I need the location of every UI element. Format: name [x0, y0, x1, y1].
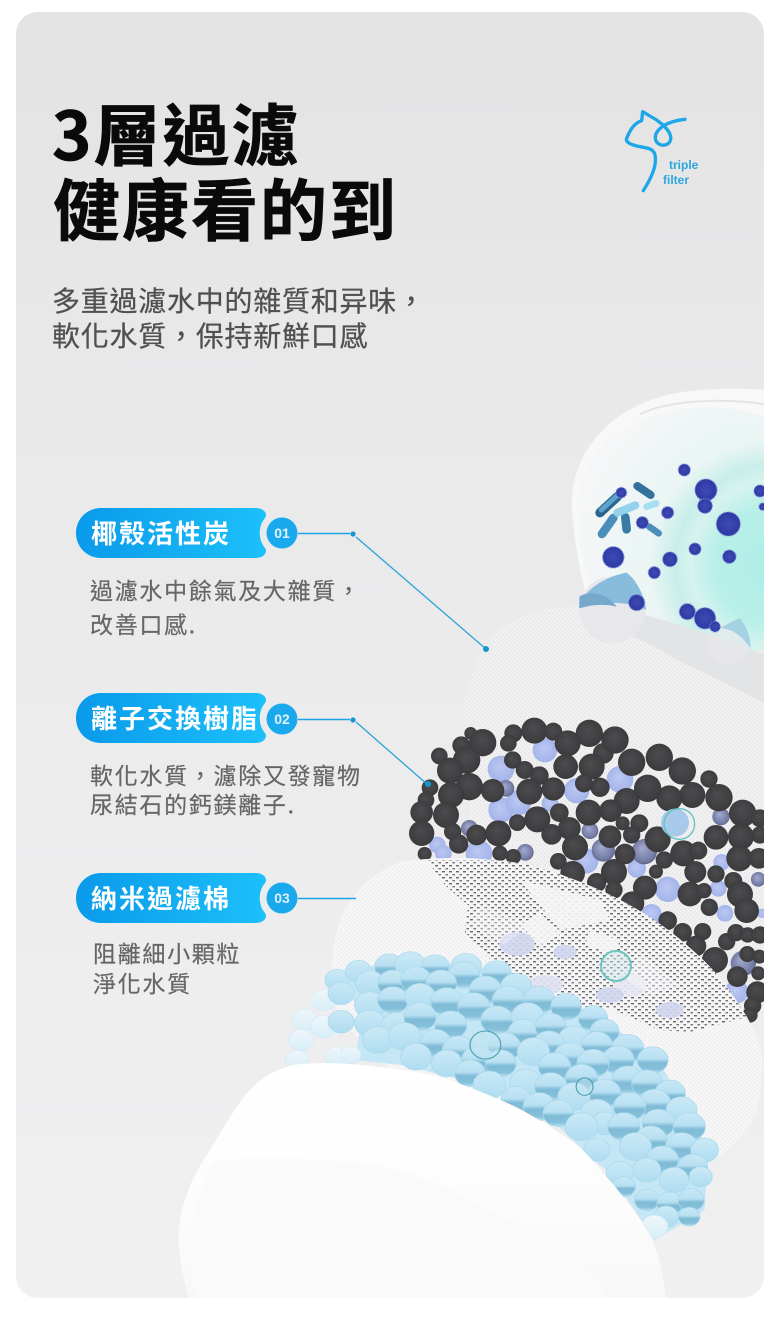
- callout 02: ion exchange resin: 尿結石的鈣鎂離子.: [90, 786, 296, 820]
- label pill: [76, 873, 266, 923]
- label pill: [76, 693, 266, 743]
- description: 阻離細小顆粒: [93, 935, 241, 969]
- resin beads behind: [429, 738, 766, 1003]
- resin seen through mesh: [499, 932, 684, 1018]
- callout 01: coconut shell carbon: 01: [274, 525, 290, 541]
- number badge: [266, 882, 298, 914]
- logo text: [663, 158, 699, 187]
- number badge: [266, 704, 298, 734]
- white foam filter: [179, 1063, 666, 1298]
- air bubble on mesh: [601, 951, 631, 981]
- mesh filter layer 1: [463, 607, 764, 1000]
- virus particles: [603, 464, 766, 579]
- water bubble on carbon: [661, 809, 695, 839]
- callout 03: nano filter cotton: 淨化水質: [93, 965, 192, 999]
- mesh filter layer 2: [332, 858, 762, 1160]
- subtitle: [52, 280, 426, 355]
- carbon spheres: [409, 718, 769, 1023]
- callout 01: coconut shell carbon: 改善口感.: [90, 606, 197, 640]
- callout 01: coconut shell carbon: 椰殼活性炭: [91, 514, 231, 551]
- bacteria: [600, 486, 659, 534]
- callout 01: coconut shell carbon: [76, 508, 362, 640]
- logo text: triple: [669, 158, 699, 172]
- title: 3層過濾: [52, 83, 301, 180]
- icon: cat line mark: [626, 112, 685, 191]
- blue water-softening beads: [285, 952, 718, 1240]
- subtitle: 多重過濾水中的雜質和异味，: [52, 280, 426, 320]
- activated carbon and resin beads: [409, 718, 769, 1023]
- callout 02: ion exchange resin: 02: [274, 711, 290, 727]
- number badge: [266, 518, 298, 548]
- glass bubbles among beads: [470, 1031, 593, 1095]
- solid gaps in mesh: [470, 880, 680, 995]
- callout 03: nano filter cotton: [76, 873, 356, 999]
- callout 02: ion exchange resin: [76, 693, 362, 820]
- mesh holes region: [427, 860, 747, 1032]
- subtitle: 軟化水質，保持新鮮口感: [52, 315, 368, 355]
- water droplets on mesh: [579, 573, 751, 664]
- top cap disc: [572, 389, 766, 650]
- filter cartridge illustration: [179, 389, 769, 1298]
- description: 過濾水中餘氣及大雜質，: [90, 572, 362, 606]
- callout 02: ion exchange resin: 離子交換樹脂: [91, 699, 259, 736]
- callout 03: nano filter cotton: 03: [274, 890, 290, 906]
- callout 03: nano filter cotton: 納米過濾棉: [91, 879, 231, 916]
- logo text: filter: [663, 173, 689, 187]
- title: [52, 83, 398, 255]
- title: 健康看的到: [53, 158, 398, 255]
- description: 軟化水質，濾除又發寵物: [90, 757, 362, 791]
- connector lines and dots to filter layers: [356, 537, 489, 787]
- logo: triple filter cat: [626, 112, 699, 191]
- label pill: [76, 508, 266, 558]
